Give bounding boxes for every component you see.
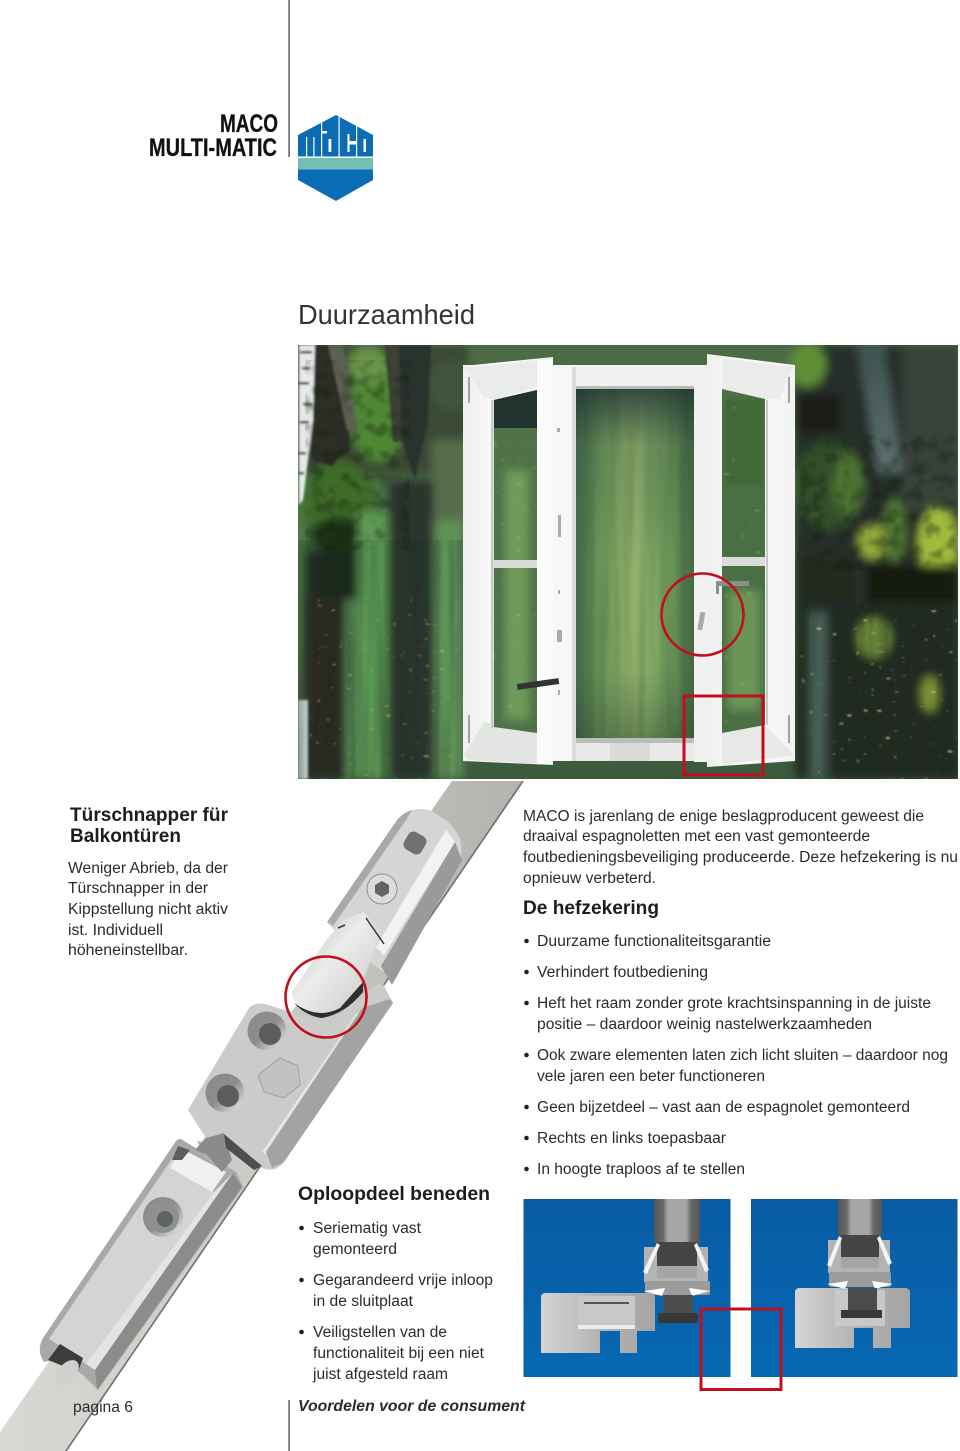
- list: hefzekering benefits: Duurzame functionaliteitsgarantie: [537, 933, 771, 950]
- centre glass: [576, 389, 694, 738]
- right leaf: [694, 761, 707, 762]
- hardware: espagnolette lock: [0, 781, 524, 1451]
- foliage texture: [305, 360, 957, 570]
- list: Oploopdeel benefits: gemonteerd: [313, 1241, 397, 1258]
- latch tongue: [292, 912, 380, 1015]
- list: Oploopdeel benefits: in de sluitplaat: [313, 1293, 414, 1310]
- text block: intro: foutbedieningsbeveiliging produceerde. Deze hefzekering is nu: [523, 849, 958, 866]
- text block: Türschnapper: [68, 860, 228, 959]
- title: Duurzaamheid: [298, 299, 475, 330]
- list: hefzekering benefits: positie – daardoor weinig nastelwerkzaamheden: [537, 1016, 872, 1033]
- list: hefzekering benefits: In hoogte traploos af te stellen: [537, 1161, 745, 1178]
- list: hefzekering benefits: Verhindert foutbediening: [537, 964, 708, 981]
- callout circle: [662, 574, 744, 656]
- lower plate: [40, 1139, 243, 1390]
- window frame: [463, 365, 707, 367]
- list: hefzekering benefits: Ook zware elementen laten zich licht sluiten – daardoor nog: [537, 1047, 948, 1064]
- text block: Türschnapper: Türschnapper in der: [68, 880, 208, 897]
- list: hefzekering benefits: vele jaren een beter functioneren: [537, 1068, 765, 1085]
- forest background left: [298, 345, 472, 779]
- brand text: MACO MULTI-MATIC: [149, 110, 278, 162]
- brand text: MACO MULTI-MATIC: MACO: [220, 110, 278, 138]
- text block: intro: MACO is jarenlang de enige beslagproducent geweest die: [523, 808, 924, 825]
- text block: Türschnapper: Weniger Abrieb, da der: [68, 860, 228, 877]
- heading: Oploopdeel beneden: Oploopdeel beneden: [298, 1183, 490, 1205]
- heading: Türschnapper für Balkontüren: Balkontüren: [70, 825, 181, 847]
- text block: Türschnapper: ist. Individuell: [68, 922, 163, 939]
- middle block: [188, 982, 393, 1172]
- espagnolette strip: [0, 781, 522, 1451]
- list: hefzekering benefits: Rechts en links toepasbaar: [537, 1130, 726, 1147]
- footer label: Voordelen voor de consument: [298, 1398, 526, 1415]
- text block: Türschnapper: höheneinstellbar.: [68, 942, 188, 959]
- text block: Türschnapper: Kippstellung nicht aktiv: [68, 901, 228, 918]
- water speckles: [305, 590, 463, 779]
- image: closed hardware right: [751, 1199, 958, 1377]
- text block: intro: [523, 808, 958, 887]
- tree trunks left: [298, 345, 431, 779]
- list: Oploopdeel benefits: Veiligstellen van de: [313, 1324, 447, 1341]
- photo: window in forest pond: [298, 343, 960, 779]
- callout square: [701, 1309, 781, 1390]
- callout circle: [286, 956, 366, 1038]
- text block: intro: opnieuw verbeterd.: [523, 870, 656, 887]
- list: hefzekering benefits: [524, 933, 948, 1178]
- icon: maco hexagon logo: [298, 110, 374, 201]
- list: Oploopdeel benefits: Gegarandeerd vrije inloop: [313, 1272, 493, 1289]
- list: hefzekering benefits: Geen bijzetdeel – vast aan de espagnolet gemonteerd: [537, 1099, 910, 1116]
- forest background right: [790, 343, 960, 779]
- upper plate: [327, 809, 462, 985]
- list: Oploopdeel benefits: functionaliteit bij een niet: [313, 1345, 485, 1362]
- heading: De hefzekering: De hefzekering: [523, 897, 659, 919]
- heading: Türschnapper für Balkontüren: [70, 804, 228, 847]
- water streaks: [298, 540, 464, 779]
- left leaf: [463, 357, 553, 765]
- image: closed hardware left: [524, 1199, 730, 1377]
- brand text: MACO MULTI-MATIC: MULTI-MATIC: [149, 134, 277, 162]
- page number: pagina 6: [73, 1399, 133, 1416]
- list: Oploopdeel benefits: Seriematig vast: [313, 1220, 422, 1237]
- list: Oploopdeel benefits: juist afgesteld raam: [312, 1366, 448, 1383]
- heading: Türschnapper für Balkontüren: Türschnapper für: [70, 804, 228, 826]
- list: Oploopdeel benefits: [299, 1220, 493, 1383]
- handles: [517, 678, 559, 690]
- text block: intro: draaival espagnoletten met een vast gemonteerde: [523, 828, 870, 845]
- callout square: [684, 696, 763, 775]
- page header rule: [288, 0, 290, 157]
- list: hefzekering benefits: Heft het raam zonder grote krachtsinspanning in de juiste: [537, 995, 931, 1012]
